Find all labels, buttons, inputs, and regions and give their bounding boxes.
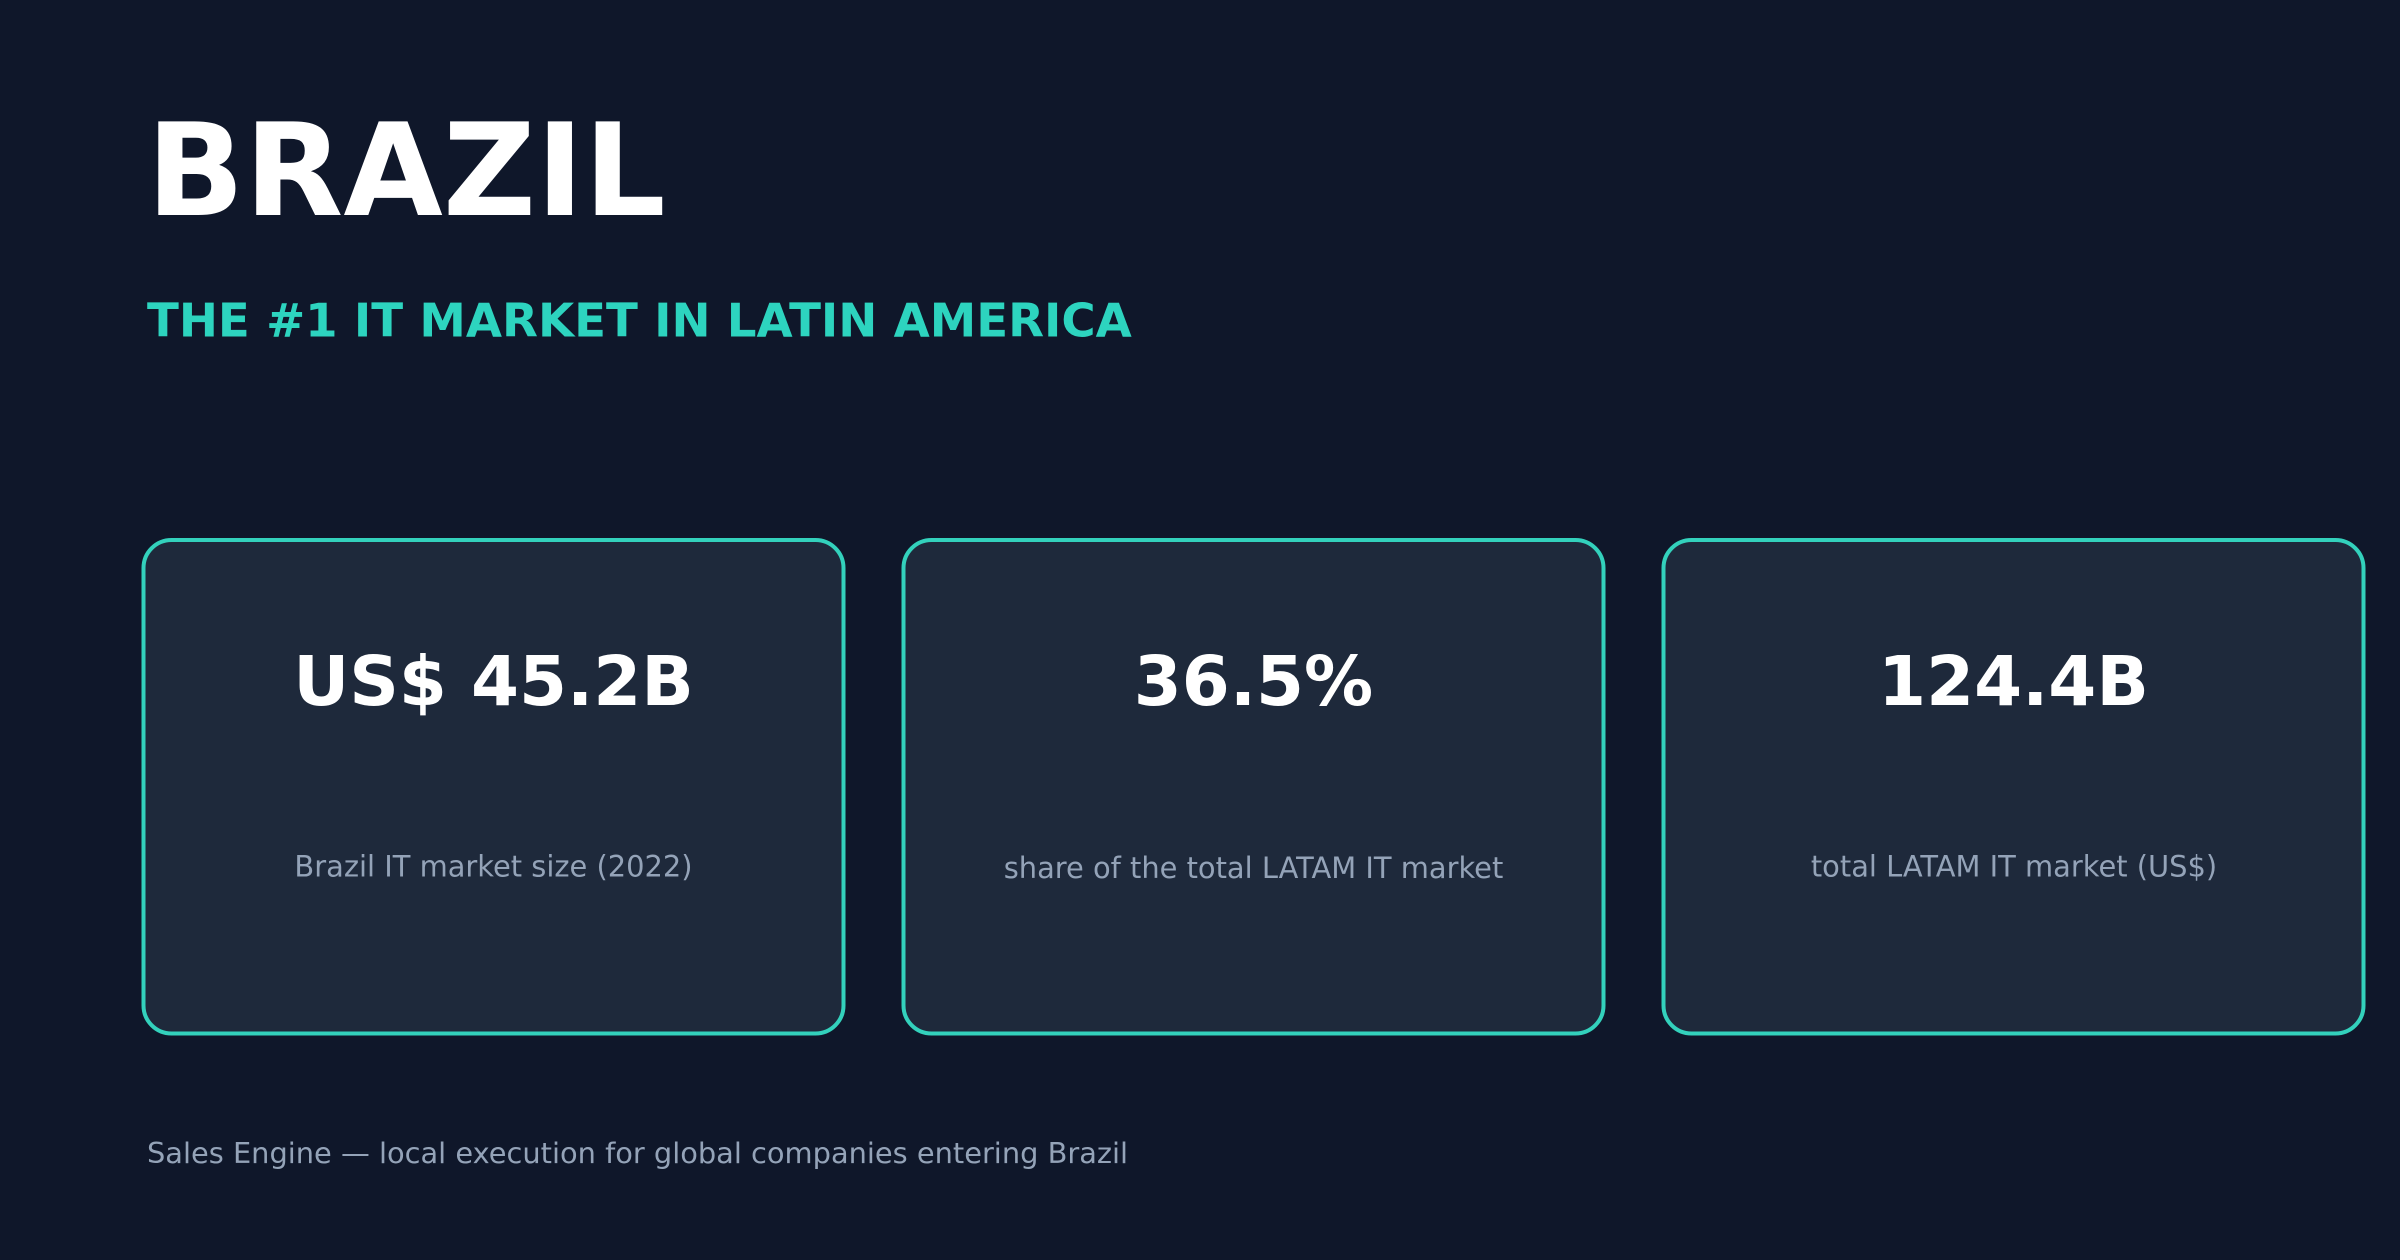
title: BRAZIL	[146, 97, 666, 246]
metric value: US$ 45.2B	[293, 642, 694, 722]
footer text: Sales Engine — local execution for global companies entering Brazil	[147, 1136, 1128, 1170]
metric label: share of the total LATAM IT market	[1004, 851, 1503, 885]
panel: LATAM share	[904, 540, 1604, 1034]
panel: Brazil IT market size	[144, 540, 844, 1034]
metric label: total LATAM IT market (US$)	[1811, 850, 2217, 884]
metric value: 36.5%	[1134, 642, 1373, 722]
metric label: Brazil IT market size (2022)	[294, 850, 693, 884]
panel: total LATAM market	[1664, 540, 2364, 1034]
subtitle: THE #1 IT MARKET IN LATIN AMERICA	[147, 294, 1132, 348]
metric value: 124.4B	[1878, 642, 2149, 722]
